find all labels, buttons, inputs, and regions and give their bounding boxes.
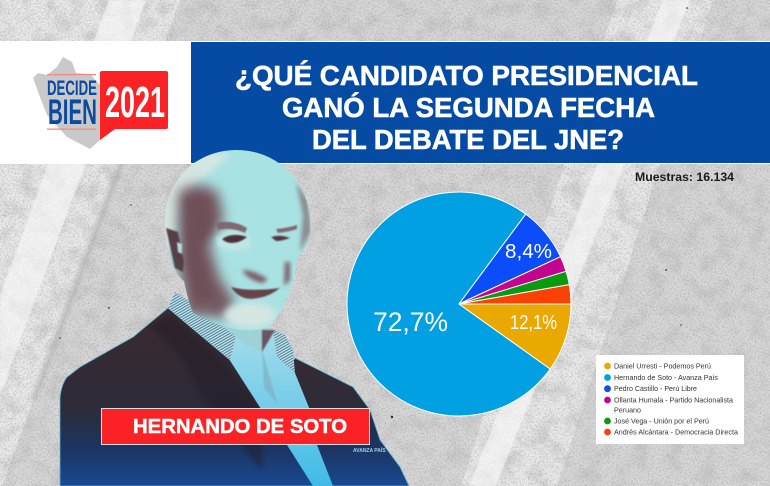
eye socket highlight <box>216 231 250 251</box>
hair highlight <box>160 150 230 250</box>
left collar <box>168 292 237 360</box>
pie chart <box>347 192 571 416</box>
title: DEL DEBATE DEL JNE? <box>312 124 624 155</box>
head <box>165 150 310 330</box>
slice: Pedro Castillo 8.4% <box>459 214 560 304</box>
shirt shadow <box>262 350 278 405</box>
right eye <box>271 236 290 241</box>
right brow <box>276 225 297 233</box>
mouth <box>231 286 282 299</box>
pie value labels <box>373 241 557 337</box>
shirt front <box>230 330 333 486</box>
lapel shading <box>150 315 262 470</box>
pie value labels: 72,7% <box>373 307 448 337</box>
title: ¿QUÉ CANDIDATO PRESIDENCIAL <box>235 60 698 91</box>
face shadow: broad <box>178 185 234 318</box>
icon: map of Peru <box>33 57 100 149</box>
slice: Hernando de Soto 72.7% <box>347 192 550 416</box>
jacket <box>60 308 409 486</box>
ear <box>166 228 184 272</box>
title: GANÓ LA SEGUNDA FECHA <box>282 92 655 123</box>
left brow <box>216 222 247 233</box>
legend item: José Vega: José Vega - Unión por el Perú <box>614 416 709 426</box>
pie value labels: 8,4% <box>505 241 552 263</box>
party mark: AVANZA PAÍS <box>353 446 386 454</box>
slice: Andrés Alcántara <box>459 285 571 304</box>
legend item: Andrés Alcántara: Andrés Alcántara - Democracia Directa <box>614 428 739 436</box>
portrait: Hernando de Soto <box>60 145 409 486</box>
legend item: Daniel Urresti: Daniel Urresti - Podemos Perú <box>614 362 711 371</box>
name tag <box>102 408 370 444</box>
chin highlight <box>224 303 276 327</box>
slice: José Vega <box>459 271 569 304</box>
right sideburn <box>296 182 311 252</box>
header panel <box>0 41 770 164</box>
legend item: Ollanta Humala <box>604 396 734 414</box>
legend item: Hernando de Soto: Hernando de Soto - Avanza País <box>614 373 718 382</box>
right cheek crease <box>284 262 290 286</box>
title <box>235 60 698 155</box>
slice: Ollanta Humala <box>459 257 566 304</box>
legend item: Ollanta Humala: Peruano <box>614 406 641 414</box>
nose shadow <box>242 270 267 283</box>
face shadow: core <box>186 196 216 300</box>
left eye <box>222 235 247 243</box>
legend item: Pedro Castillo: Pedro Castillo - Perú Libre <box>614 384 697 393</box>
sample size label: Muestras: 16.134 <box>635 172 735 184</box>
red rules <box>47 74 96 75</box>
logo word: BIEN: BIEN <box>48 93 97 132</box>
right collar <box>273 330 295 373</box>
pie value labels: 12,1% <box>510 312 557 334</box>
logo speech bubble: 2021: 2021 <box>105 78 165 127</box>
legend <box>596 355 744 444</box>
slice: Daniel Urresti 12.1% <box>459 304 571 369</box>
legend item: Ollanta Humala: Ollanta Humala - Partido Nacionalista <box>614 396 734 404</box>
name tag: HERNANDO DE SOTO <box>133 415 347 438</box>
logo: Decide Bien 2021 <box>33 57 168 149</box>
title banner: blue background <box>191 41 770 164</box>
logo panel: white background <box>0 41 191 164</box>
neck <box>195 312 272 352</box>
logo word: DECIDE: DECIDE <box>47 77 97 100</box>
